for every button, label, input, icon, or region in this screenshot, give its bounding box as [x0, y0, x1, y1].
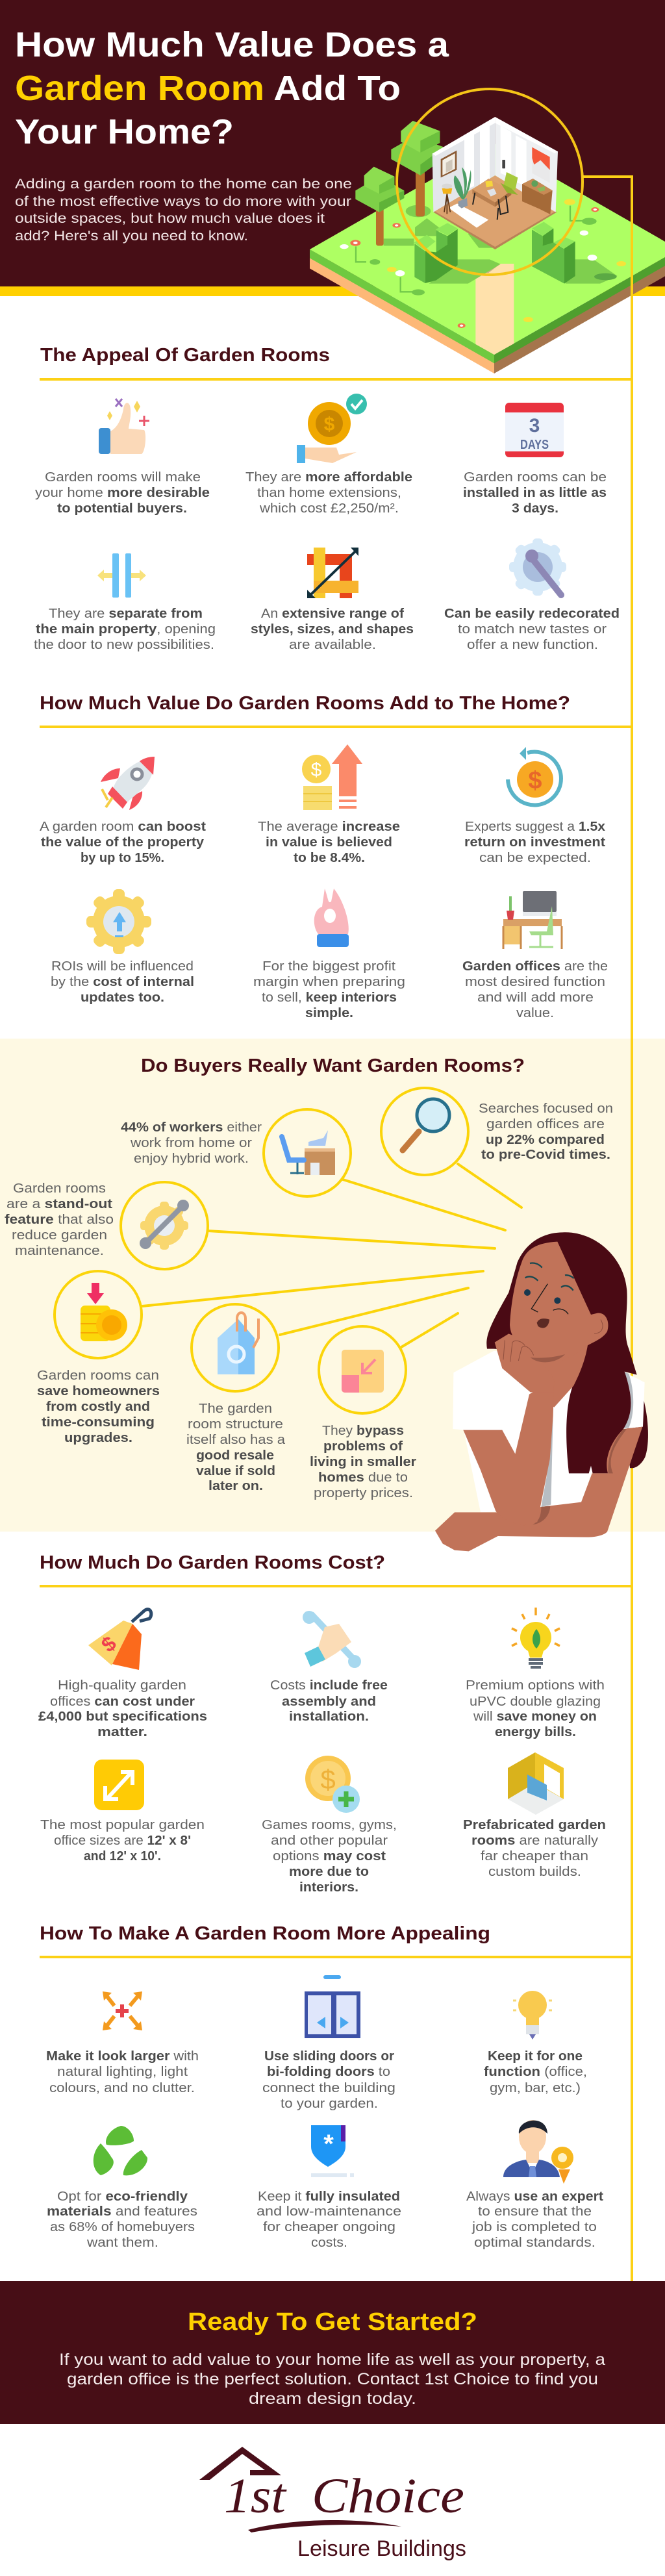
text: more desirable: your home more desirable: [35, 486, 210, 500]
desk chair cabinet: [472, 179, 511, 203]
text: keep interiors simple: [253, 959, 405, 1020]
text: 1.5x return: [464, 820, 605, 865]
text: searches: [479, 1102, 613, 1162]
icon: resale tag: [192, 1304, 279, 1391]
text: smaller homes: property prices.: [314, 1486, 413, 1500]
card: separate: [34, 553, 216, 652]
card: fully insulated: [257, 2125, 401, 2250]
text: resale: itself also has a: [186, 1433, 286, 1447]
icon: shield: [311, 2125, 354, 2177]
text: may cost more: interiors.: [299, 1880, 358, 1895]
icon: recycling leaves: [94, 2126, 147, 2175]
heading: ready to get started: Ready To Get Started?: [188, 2308, 477, 2336]
intro text: add? Here's all you need to know.: [15, 228, 248, 244]
card: use an expert: [466, 2120, 603, 2250]
text: stand-out: maintenance.: [15, 1244, 104, 1258]
text: energy bills: uPVC double glazing: [470, 1695, 601, 1709]
icon: calendar: [505, 403, 564, 457]
text: stand-out: Garden rooms: [13, 1181, 106, 1196]
tree large: [416, 171, 425, 216]
text: look larger: Make it look larger with: [46, 2049, 199, 2064]
text: 1.5x return: Experts suggest a 1.5x: [465, 820, 605, 834]
text: eco friendly: Opt for eco-friendly: [57, 2190, 188, 2204]
text: use an expert: Always use an expert: [466, 2190, 603, 2204]
text: fully insulated: [257, 2190, 401, 2250]
connector rays: [142, 1164, 521, 1347]
icon: hand with spanner: [303, 1611, 361, 1668]
text: garden offices: [462, 959, 608, 1020]
text: more desirable: to potential buyers.: [57, 501, 187, 516]
text: separate: the main property , opening: [36, 622, 216, 637]
text: smaller homes: living in smaller: [310, 1455, 416, 1469]
text: may cost more: [262, 1818, 397, 1895]
card: may cost more: [262, 1756, 397, 1895]
section: appeal heading: The Appeal Of Garden Rooms: [40, 345, 330, 366]
text: call to action: [59, 2351, 605, 2408]
text: three days: 3 days.: [512, 501, 558, 516]
text: more affordable: [245, 470, 412, 516]
text: smaller homes: problems of: [323, 1439, 403, 1454]
hedges: [436, 231, 447, 266]
intro text: of the most effective ways to do more with your: [15, 194, 351, 209]
text: internal updates: ROIs will be influenced: [51, 959, 194, 974]
icon: coins and arrow: $: [311, 759, 322, 781]
plant and lamp: [458, 198, 468, 208]
text: sliding doors: Use sliding doors or: [264, 2049, 394, 2064]
text: free assembly: [270, 1678, 388, 1724]
callout: save homeowners: [37, 1271, 160, 1445]
text: may cost more: Games rooms, gyms,: [262, 1818, 397, 1832]
icon: coins and arrow: [302, 744, 362, 810]
text: separate: the door to new possibilities.: [34, 638, 214, 652]
text: office sizes: The most popular garden: [40, 1818, 205, 1832]
text: energy bills: [466, 1678, 605, 1739]
card: more desirable: [35, 399, 210, 516]
text: searches: garden offices are: [486, 1117, 605, 1131]
text: look larger: [46, 2049, 199, 2095]
card: keep interiors simple: [253, 889, 405, 1020]
icon: magnifier: [381, 1088, 468, 1175]
text: resale: The garden: [199, 1402, 272, 1416]
icon: return cycle: $: [528, 767, 542, 794]
connector line: circle to vertical timeline: [397, 89, 632, 2281]
intro text: outside spaces, but how much value does it: [15, 210, 325, 226]
section: cost heading: [40, 1552, 632, 1587]
text: eco friendly: want them.: [86, 2236, 158, 2250]
text: call to action: dream design today.: [249, 2390, 416, 2408]
text: prefabricated: [463, 1818, 606, 1879]
text: keep interiors simple: to sell, keep interiors: [262, 991, 397, 1005]
text: separate: They are separate from: [49, 607, 203, 621]
text: workers: [121, 1120, 262, 1166]
icon: rocket: [101, 757, 155, 810]
icon: price tag: $: [97, 1632, 121, 1657]
card: office sizes: [40, 1760, 205, 1863]
card: under 4000: [38, 1610, 207, 1739]
text: internal updates: [51, 959, 194, 1005]
flowers: [350, 207, 599, 328]
section: cost heading: How Much Do Garden Rooms Cost?: [40, 1552, 385, 1573]
text: office sizes: office sizes are 12' x 8': [54, 1834, 191, 1848]
card: three days: [463, 403, 607, 516]
logo: 1st Choice Leisure Buildings: Leisure Buildings: [297, 2536, 466, 2561]
panel: do buyers want garden rooms: [0, 1039, 665, 1532]
tree small: [376, 206, 384, 246]
text: stand-out: [5, 1181, 114, 1258]
text: 1.5x return: can be expected.: [479, 851, 591, 865]
text: garden offices: and will add more: [477, 991, 594, 1005]
illustration: thinking woman: [435, 1232, 648, 1551]
icon: office desk: [503, 891, 562, 949]
text: extensive range: [251, 607, 414, 652]
card: look larger: [46, 1991, 199, 2095]
text: stand-out: are a stand-out: [6, 1197, 112, 1211]
icon: gear and spanner: [121, 1182, 208, 1269]
icon: coin plus: [305, 1756, 360, 1813]
text: workers: work from home or: [130, 1136, 252, 1150]
text: more desirable: Garden rooms will make: [45, 470, 201, 485]
text: sliding doors: bi-folding doors to: [267, 2065, 390, 2079]
text: three days: Garden rooms can be: [464, 470, 607, 485]
card: redecorated: [444, 538, 620, 652]
text: more affordable: which cost £2,250/m².: [259, 501, 399, 516]
card: boost 15%: [40, 757, 206, 865]
text: resale: room structure: [188, 1417, 283, 1432]
text: fully insulated: costs.: [311, 2236, 347, 2250]
text: resale: value if sold: [196, 1464, 275, 1478]
text: searches: up 22% compared: [486, 1133, 605, 1147]
text: fully insulated: for cheaper ongoing: [263, 2220, 395, 2234]
text: extensive range: An extensive range of: [261, 607, 404, 621]
text: 8.4% increase: [258, 820, 400, 865]
text: redecorated: Can be easily redecorated: [444, 607, 620, 621]
room floor: [433, 177, 557, 249]
text: energy bills: will save money on: [473, 1710, 597, 1724]
text: one function: gym, bar, etc.): [490, 2081, 581, 2095]
text: redecorated: offer a new function.: [467, 638, 598, 652]
text: call to action: garden office is the perfect solution. Contact 1st Choice to find you: [67, 2370, 598, 2388]
icon: shield: *: [323, 2130, 334, 2158]
text: energy bills: energy bills.: [495, 1725, 576, 1739]
icon: shrink square: [319, 1326, 406, 1413]
heading: buyers: Do Buyers Really Want Garden Rooms?: [141, 1055, 525, 1076]
text: save: from costly and: [46, 1400, 150, 1414]
text: keep interiors simple: For the biggest profit: [262, 959, 395, 974]
card: 1.5x return: [464, 747, 605, 865]
text: eco friendly: as 68% of homebuyers: [50, 2220, 195, 2234]
text: fully insulated: Keep it fully insulated: [258, 2190, 400, 2204]
icon: eco light bulb: [512, 1608, 560, 1669]
icon: expand arrows: [103, 1991, 142, 2030]
room walls: [433, 117, 495, 212]
text: one function: [484, 2049, 587, 2095]
text: one function: Keep it for one: [488, 2049, 583, 2064]
text: extensive range: are available.: [289, 638, 376, 652]
icon: gear and wrench: [509, 538, 566, 596]
text: smaller homes: homes due to: [318, 1471, 408, 1485]
text: extensive range: styles, sizes, and shapes: [251, 622, 414, 637]
card: garden offices: [462, 891, 608, 1020]
text: eco friendly: materials and features: [47, 2204, 197, 2219]
card: eco friendly: [47, 2126, 197, 2250]
text: prefabricated: rooms are naturally: [471, 1834, 598, 1848]
text: redecorated: [444, 607, 620, 652]
icon: coins with arrow: [55, 1271, 142, 1358]
text: save: Garden rooms can: [37, 1369, 159, 1383]
text: use an expert: [466, 2190, 603, 2250]
text: fully insulated: and low-maintenance: [257, 2204, 401, 2219]
card: sliding doors: [262, 1975, 395, 2111]
callout: searches up 22%: [381, 1088, 613, 1175]
text: eco friendly: [47, 2190, 197, 2250]
intro text: Adding a garden room to the home can be one: [15, 176, 352, 192]
text: smaller homes: [310, 1424, 416, 1500]
text: may cost more: and other popular: [271, 1834, 388, 1848]
text: stand-out: feature that also: [5, 1213, 114, 1227]
text: use an expert: job is completed to: [471, 2220, 597, 2234]
title: Garden Room Add To: [15, 69, 401, 108]
title: How Much Value Does a: [15, 25, 449, 64]
text: smaller homes: They bypass: [322, 1424, 404, 1438]
text: save: save homeowners: [37, 1384, 160, 1398]
text: 1.5x return: return on investment: [464, 835, 605, 850]
text: call to action: If you want to add value to your home life as well as your property, a: [59, 2351, 605, 2369]
card: 8.4% increase: [258, 744, 400, 865]
icon: coin plus: $: [320, 1764, 336, 1795]
text: free assembly: installation.: [289, 1710, 369, 1724]
intro text: [15, 176, 352, 244]
illustration: isometric garden room: [310, 117, 665, 373]
icon: measuring frame: [307, 548, 358, 598]
text: prefabricated: Prefabricated garden: [463, 1818, 606, 1832]
text: resale: later on.: [208, 1479, 263, 1493]
section: appealing heading: How To Make A Garden Room More Appealing: [40, 1923, 490, 1944]
text: under 4000: matter.: [97, 1725, 147, 1739]
text: boost 15%: [40, 820, 206, 865]
text: prefabricated: custom builds.: [488, 1865, 581, 1879]
text: stand-out: reduce garden: [12, 1228, 107, 1243]
panel: header background: [0, 0, 665, 296]
text: may cost more: more due to: [289, 1865, 369, 1879]
text: keep interiors simple: margin when preparing: [253, 975, 405, 989]
callout: stand-out feature: [5, 1181, 208, 1269]
card: energy bills: [466, 1608, 605, 1739]
logo: 1st Choice Leisure Buildings: 1st: [224, 2469, 287, 2523]
text: three days: [463, 470, 607, 516]
logo: 1st Choice Leisure Buildings: Choice: [312, 2469, 464, 2523]
text: sliding doors: [262, 2049, 395, 2111]
wall art: [441, 151, 457, 177]
text: use an expert: to ensure that the: [478, 2204, 592, 2219]
text: save: time-consuming: [42, 1415, 155, 1430]
title: [15, 25, 449, 151]
text: boost 15%: the value of the property: [41, 835, 205, 850]
icon: corner room: [508, 1752, 564, 1815]
card: extensive range: [251, 548, 414, 652]
icon: calendar: DAYS: [520, 438, 549, 452]
text: use an expert: optimal standards.: [474, 2236, 596, 2250]
text: searches: to pre-Covid times.: [481, 1148, 610, 1162]
text: resale: good resale: [196, 1448, 274, 1463]
icon: thumbs up: [99, 399, 149, 454]
text: 8.4% increase: The average increase: [258, 820, 400, 834]
text: searches: Searches focused on: [479, 1102, 613, 1116]
icon: light bulb: [513, 1991, 552, 2039]
callout: 44% of workers: [121, 1109, 351, 1196]
text: 8.4% increase: to be 8.4%.: [294, 851, 365, 865]
text: energy bills: Premium options with: [466, 1678, 605, 1693]
text: one function: function (office,: [484, 2065, 587, 2079]
text: more affordable: They are more affordable: [245, 470, 412, 485]
icon: yellow gear with arrow: [86, 889, 151, 954]
text: garden offices: value.: [516, 1006, 554, 1020]
card: one function: [484, 1991, 587, 2095]
card: internal updates: [51, 889, 194, 1005]
text: 8.4% increase: in value is believed: [266, 835, 392, 850]
text: prefabricated: far cheaper than: [481, 1849, 588, 1863]
text: workers: enjoy hybrid work.: [134, 1152, 249, 1166]
text: garden offices: most desired function: [465, 975, 605, 989]
text: look larger: colours, and no clutter.: [49, 2081, 195, 2095]
icon: expand square: [94, 1760, 144, 1810]
callout: resale value: [186, 1304, 286, 1493]
section: value heading: [40, 693, 632, 728]
section: appealing heading: [40, 1923, 632, 1958]
card: free assembly: [270, 1611, 388, 1724]
text: internal updates: updates too.: [81, 991, 164, 1005]
icon: coin on hand: $: [324, 414, 335, 435]
text: sliding doors: connect the building: [262, 2081, 395, 2095]
text: resale: [186, 1402, 286, 1493]
text: garden offices: Garden offices are the: [462, 959, 608, 974]
text: may cost more: options may cost: [273, 1849, 386, 1863]
text: free assembly: Costs include free: [270, 1678, 388, 1693]
card: prefabricated: [463, 1752, 606, 1879]
text: internal updates: by the cost of internal: [51, 975, 194, 989]
text: free assembly: assembly and: [282, 1695, 376, 1709]
text: save: upgrades.: [64, 1431, 132, 1445]
text: boost 15%: by up to 15%.: [81, 851, 164, 865]
text: boost 15%: A garden room can boost: [40, 820, 206, 834]
icon: coin on hand: [297, 394, 367, 463]
icon: desk and chair: [264, 1109, 351, 1196]
text: more affordable: than home extensions,: [257, 486, 401, 500]
icon: ok hand: [314, 889, 349, 947]
icon: return cycle: [508, 747, 561, 805]
icon: calendar: 3: [529, 415, 540, 436]
text: look larger: natural lighting, light: [57, 2065, 188, 2079]
section: appeal heading: [40, 345, 632, 381]
text: office sizes: [40, 1818, 205, 1863]
card: more affordable: [245, 394, 412, 516]
logo: 1st Choice Leisure Buildings: [199, 2447, 466, 2561]
text: office sizes: and 12' x 10'.: [84, 1849, 161, 1863]
text: under 4000: offices can cost under: [50, 1695, 195, 1709]
text: under 4000: [38, 1678, 207, 1739]
icon: expert with rosette: [503, 2120, 573, 2184]
text: redecorated: to match new tastes or: [458, 622, 607, 637]
text: under 4000: High-quality garden: [58, 1678, 186, 1693]
section: value heading: How Much Value Do Garden Rooms Add to The Home?: [40, 693, 570, 714]
text: sliding doors: to your garden.: [281, 2097, 378, 2111]
text: more desirable: [35, 470, 210, 516]
icon: price tag: [88, 1610, 151, 1670]
text: workers: 44% of workers either: [121, 1120, 262, 1135]
text: three days: installed in as little as: [463, 486, 607, 500]
icon: sliding doors: [305, 1975, 360, 2038]
title: Your Home?: [15, 112, 234, 151]
callout: smaller homes: [310, 1326, 416, 1500]
text: separate: [34, 607, 216, 652]
icon: separated bars: [97, 553, 146, 598]
panel: call to action: [0, 2281, 665, 2424]
text: under 4000: £4,000 but specifications: [38, 1710, 207, 1724]
text: keep interiors simple: simple.: [305, 1006, 353, 1020]
text: save: [37, 1369, 160, 1445]
